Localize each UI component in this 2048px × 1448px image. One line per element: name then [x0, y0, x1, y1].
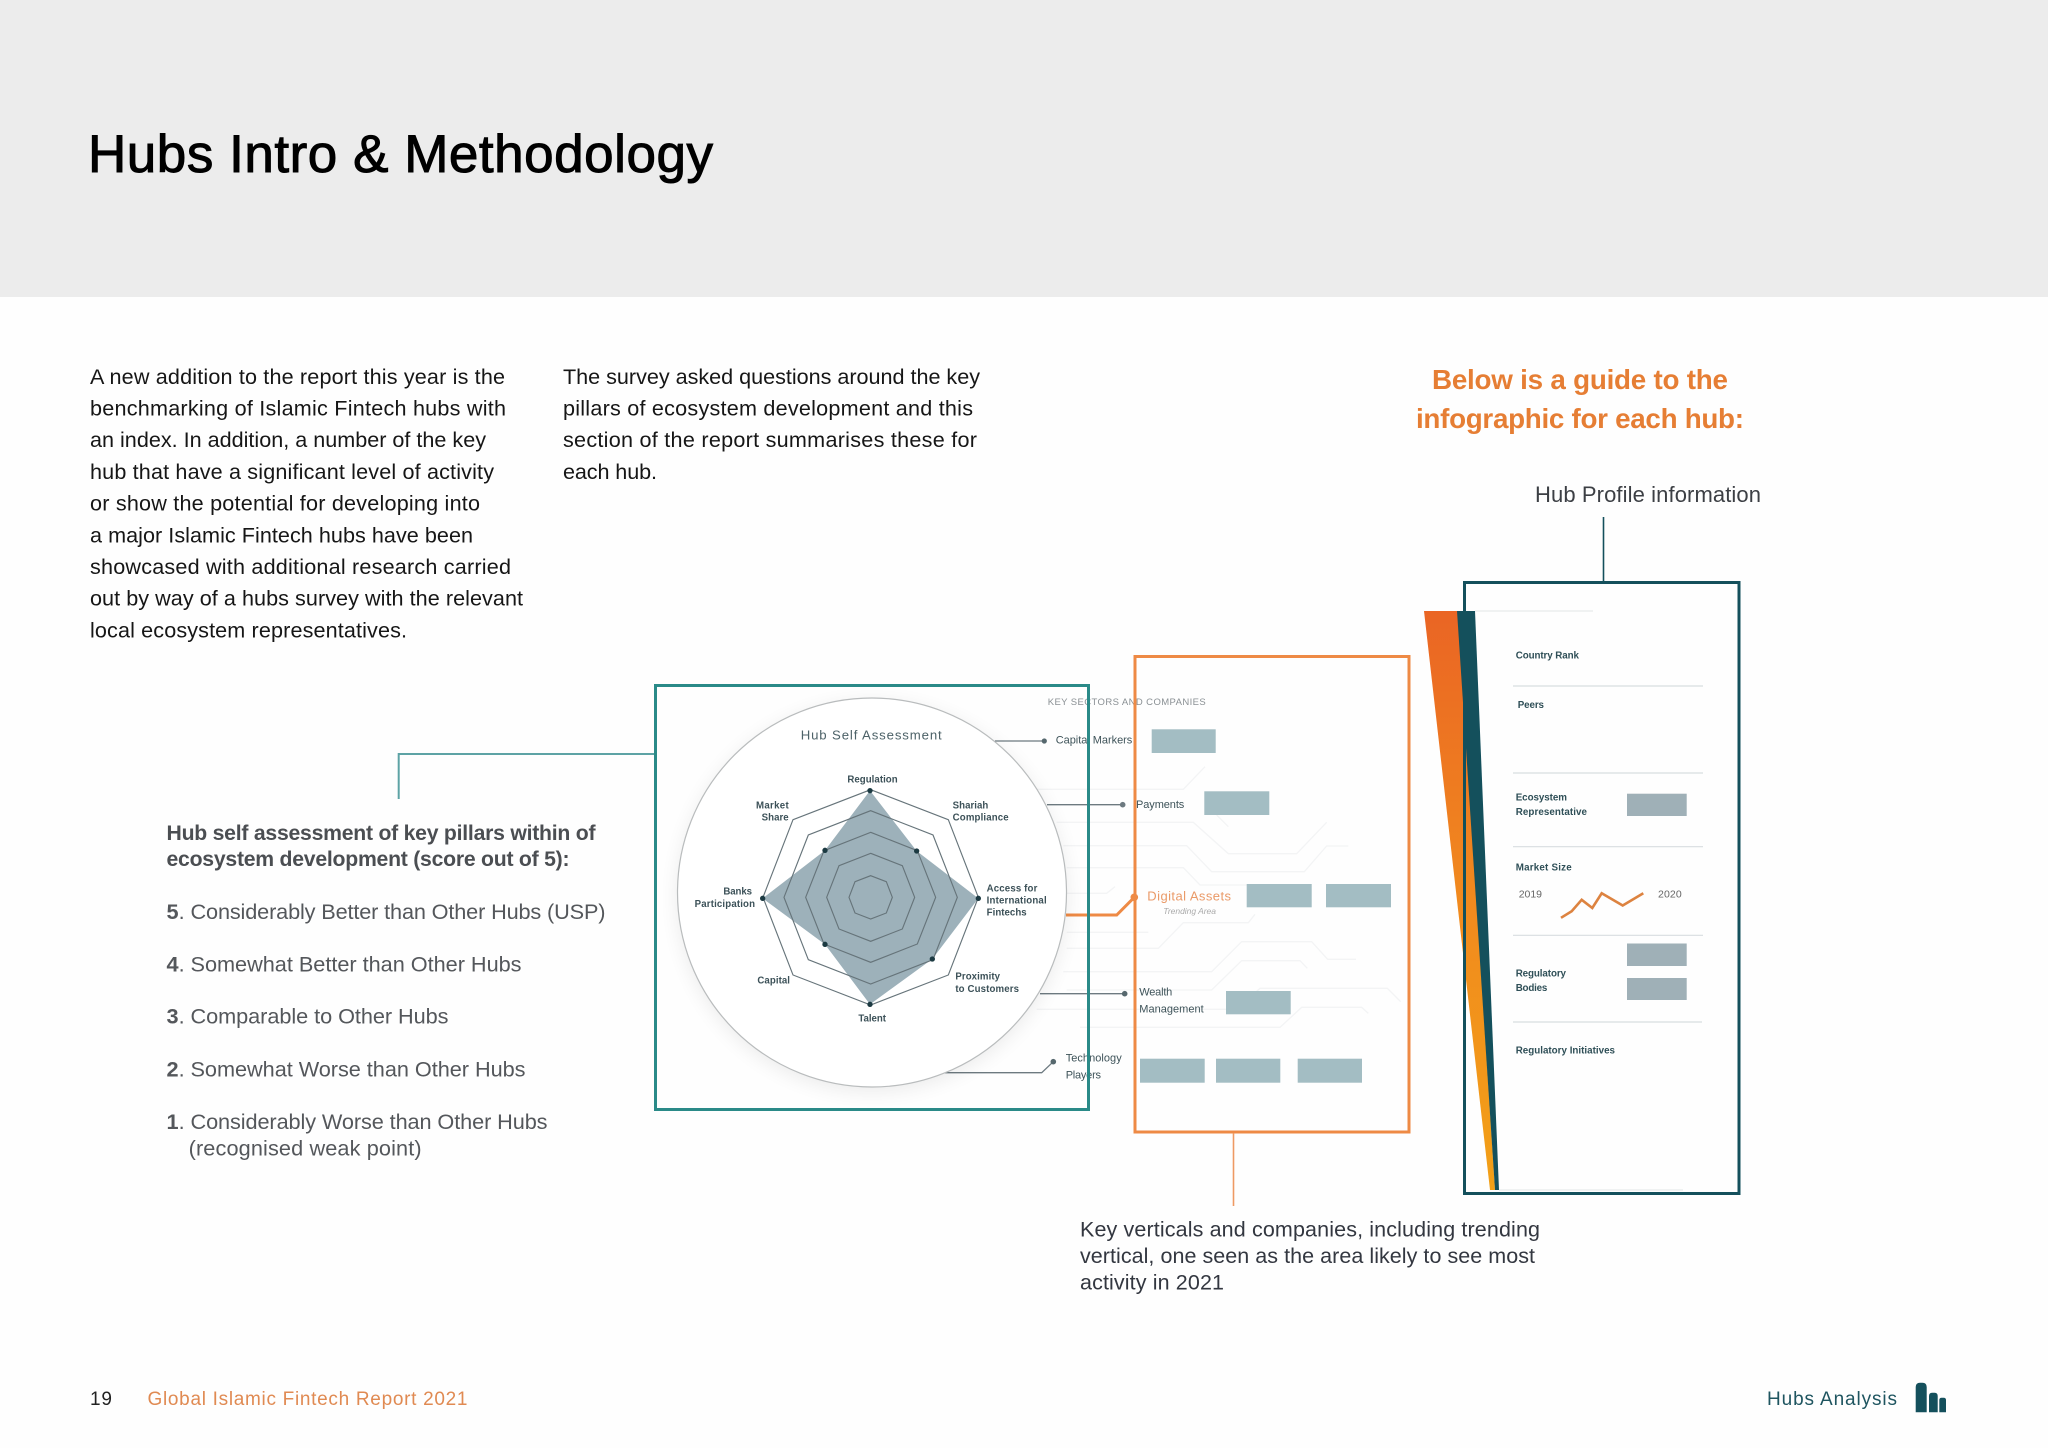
legend item 1: Considerably Worse than Other Hubs: [190, 1109, 548, 1134]
sector: digital assets trending area: Trending Area: [1163, 906, 1216, 916]
text block: survey paragraph: each hub.: [563, 459, 657, 484]
hub profile graphic: [1424, 611, 1703, 1190]
legend item 2: Somewhat Worse than Other Hubs: [190, 1056, 526, 1081]
radar chart: hub self assessment: [678, 698, 1066, 1091]
title: Hubs Intro & Methodology: [88, 125, 714, 184]
legend item 5: Considerably Better than Other Hubs (USP): [190, 899, 606, 924]
radar axis labels: International: [987, 895, 1047, 906]
profile: regulatory bodies: Bodies: [1516, 983, 1548, 994]
text block: intro paragraph: [90, 364, 523, 642]
text block: key verticals caption: [1080, 1218, 1540, 1294]
radar data points: [760, 788, 981, 1007]
profile: regulatory bodies: Regulatory: [1516, 968, 1567, 980]
radar axis labels: Market: [756, 800, 789, 811]
connector: key verticals: [1232, 1133, 1234, 1206]
radar axis labels: Compliance: [953, 812, 1009, 823]
dark wedge: [1457, 611, 1499, 1190]
text block: intro paragraph: showcased with additional research carried: [90, 554, 511, 579]
heading: guide to the infographic: Below is a guide to the: [1432, 364, 1728, 395]
text block: key verticals caption: activity in 2021: [1080, 1270, 1224, 1294]
sector: wealth management: Wealth: [1139, 987, 1172, 999]
radar axis labels: [695, 775, 1047, 1025]
header band: [0, 0, 2048, 297]
sector: payments: [1047, 791, 1269, 815]
sector: technology players: Players: [1066, 1070, 1102, 1082]
profile: market size: Market Size: [1516, 862, 1572, 873]
profile: market size: 2020: [1658, 889, 1682, 901]
text block: key verticals caption: vertical, one seen as the area likely to see most: [1080, 1244, 1535, 1268]
callout frame: key sectors: [1135, 656, 1409, 1132]
radar data area: [763, 791, 978, 1004]
profile: regulatory bodies: [1516, 944, 1687, 1000]
orange wedge: [1424, 611, 1495, 1190]
text block: intro paragraph: A new addition to the report this year is the: [90, 364, 505, 389]
profile: ecosystem representative: Representative: [1516, 807, 1588, 818]
callout frame: hub profile: [1464, 582, 1739, 1194]
sectors heading: KEY SECTORS AND COMPANIES: [1048, 697, 1206, 708]
legend item 3: 3.: [166, 1004, 185, 1029]
text block: survey paragraph: [563, 364, 980, 484]
radar axis labels: Participation: [695, 899, 755, 910]
sector: payments: Payments: [1136, 799, 1185, 811]
text block: key verticals caption: Key verticals and companies, including trending: [1080, 1218, 1540, 1242]
text block: intro paragraph: out by way of a hubs survey with the relevant: [90, 586, 523, 611]
text block: intro paragraph: hub that have a significant level of activity: [90, 459, 494, 484]
radar rings: [763, 790, 978, 1005]
footer: section name: Hubs Analysis: [1767, 1389, 1897, 1410]
radar axis labels: Capital: [757, 976, 790, 987]
radar axis labels: Fintechs: [987, 907, 1027, 918]
connector: self assessment: [399, 754, 655, 799]
circle: [678, 698, 1066, 1087]
icon: hubs analysis bars: [1916, 1383, 1946, 1412]
text block: intro paragraph: a major Islamic Fintech hubs have been: [90, 522, 473, 547]
footer: report name: Global Islamic Fintech Report 2021: [148, 1389, 468, 1410]
legend item 4: 4.: [166, 951, 185, 976]
sector: capital markets: Capital Markers: [1056, 734, 1133, 746]
profile: market size: 2019: [1519, 889, 1542, 901]
legend item 4: Somewhat Better than Other Hubs: [190, 951, 522, 976]
profile: market size: [1516, 862, 1682, 918]
text block: intro paragraph: local ecosystem representatives.: [90, 617, 407, 642]
legend heading: [166, 822, 596, 871]
text block: survey paragraph: section of the report summarises these for: [563, 427, 977, 452]
key sectors graphic: [945, 697, 1391, 1083]
profile: peers: Peers: [1518, 700, 1545, 711]
profile top and bottom edges: [1475, 611, 1683, 1190]
callout frame: self assessment: [656, 686, 1088, 1110]
sector: digital assets trending area: [1066, 884, 1391, 916]
legend item 1: 1.: [166, 1109, 185, 1134]
legend item 5: 5.: [166, 899, 185, 924]
legend item 2: 2.: [166, 1056, 185, 1081]
sector: digital assets trending area: Digital Assets: [1147, 889, 1232, 904]
sector: technology players: Technology: [1066, 1053, 1122, 1065]
legend item 1: (recognised weak point): [189, 1136, 422, 1160]
radar axis labels: Access for: [987, 883, 1038, 894]
profile: ecosystem representative: [1516, 793, 1687, 818]
profile: country rank: Country Rank: [1516, 651, 1580, 662]
connector: hub profile: [1602, 517, 1604, 583]
radar axis labels: Share: [762, 812, 789, 823]
sector: capital markets: [995, 729, 1216, 753]
footer: page number: 19: [90, 1389, 112, 1410]
legend heading: Hub self assessment of key pillars within of: [166, 822, 596, 845]
chart heading: Hub Self Assessment: [801, 727, 942, 742]
heading: guide to the infographic: [1416, 364, 1744, 434]
text block: survey paragraph: pillars of ecosystem development and this: [563, 396, 973, 420]
sector: technology players: [945, 1053, 1362, 1083]
radar axis labels: Shariah: [953, 800, 988, 811]
radar axis labels: Talent: [858, 1014, 887, 1025]
sector: wealth management: [1040, 987, 1291, 1016]
heading: guide to the infographic: infographic for each hub:: [1416, 403, 1744, 434]
profile: regulatory initiatives: Regulatory Initiatives: [1516, 1046, 1616, 1057]
text block: survey paragraph: The survey asked questions around the key: [563, 364, 980, 389]
text block: intro paragraph: benchmarking of Islamic Fintech hubs with: [90, 396, 506, 420]
radar axis labels: Proximity: [955, 972, 1001, 983]
text block: intro paragraph: an index. In addition, a number of the key: [90, 427, 486, 452]
radar axis labels: Banks: [723, 887, 752, 898]
label: hub profile information: Hub Profile information: [1535, 482, 1761, 507]
circle shadow: [678, 703, 1066, 1091]
legend heading: ecosystem development (score out of 5):: [166, 848, 570, 871]
sector: wealth management: Management: [1139, 1004, 1204, 1016]
text block: score legend: [166, 822, 606, 1160]
profile: ecosystem representative: Ecosystem: [1516, 793, 1567, 804]
legend item 1: [166, 1109, 548, 1160]
faint circuit lines: [1030, 767, 1401, 1027]
text block: intro paragraph: or show the potential for developing into: [90, 491, 480, 516]
radar axis labels: Regulation: [847, 775, 898, 786]
legend item 3: Comparable to Other Hubs: [190, 1004, 449, 1029]
radar axis labels: to Customers: [955, 984, 1019, 995]
